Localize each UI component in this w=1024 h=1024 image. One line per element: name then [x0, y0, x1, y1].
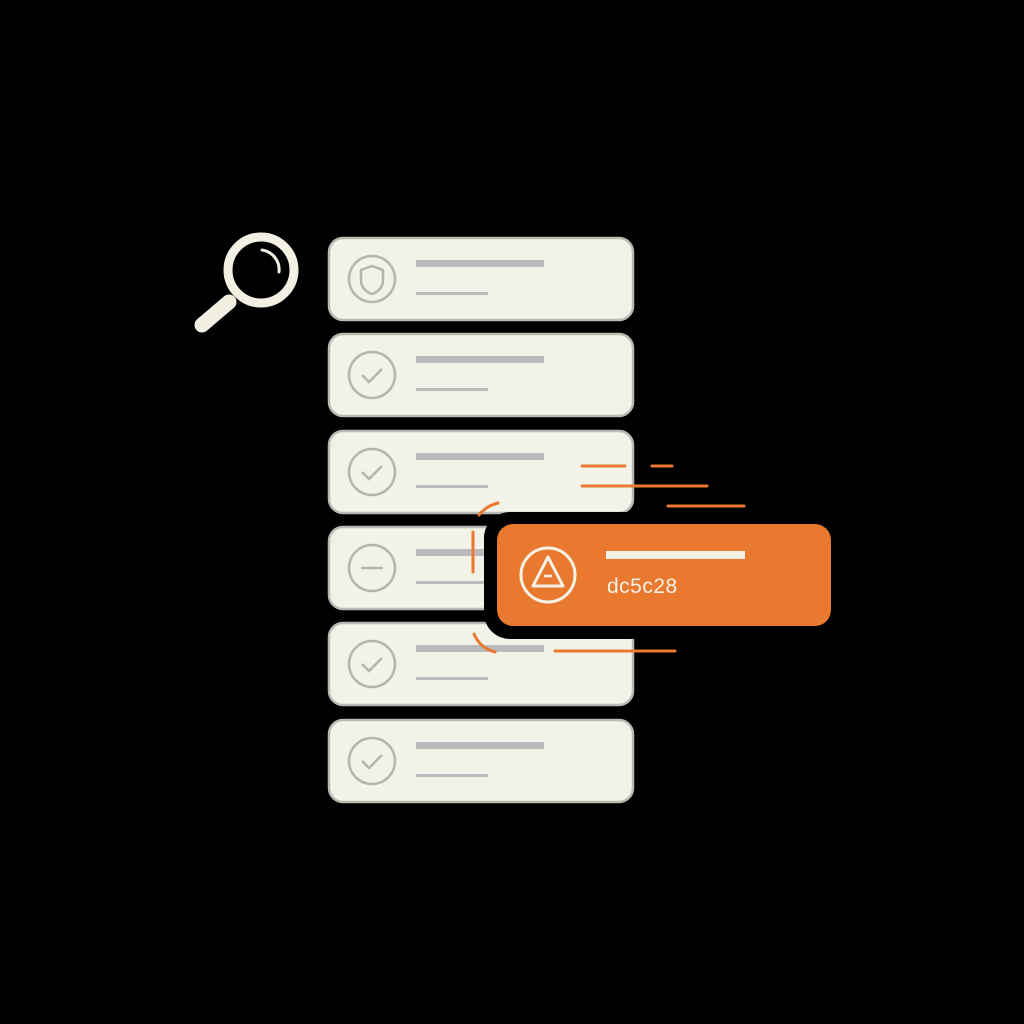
card 6: check — [329, 720, 633, 802]
card 2: check — [329, 334, 633, 416]
highlighted card: dc5c28 — [473, 503, 864, 652]
motion lines — [555, 466, 744, 651]
card 1: shield — [329, 238, 633, 320]
card 3: check — [329, 431, 633, 513]
card 5: check — [329, 623, 633, 705]
icon: magnifier — [202, 237, 294, 325]
card 4: minus — [329, 527, 633, 609]
highlighted card: dc5c28: dc5c28 — [607, 575, 678, 598]
